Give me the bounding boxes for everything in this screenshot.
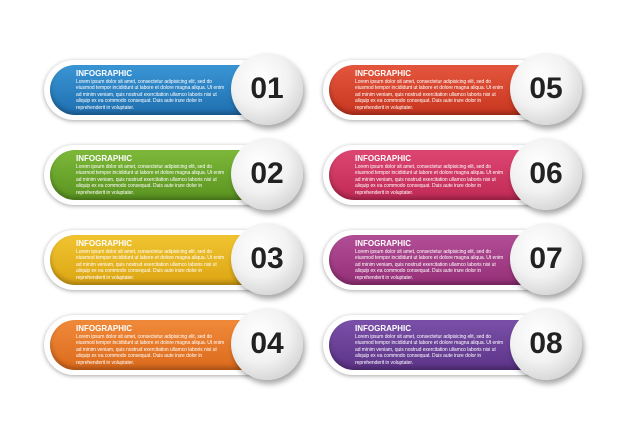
green bar — [50, 150, 265, 200]
red bar: INFOGRAPHIC — [355, 69, 411, 78]
orange bar: INFOGRAPHIC — [76, 324, 132, 333]
pink bar: INFOGRAPHIC — [355, 154, 411, 163]
item 02 — [42, 138, 308, 218]
number circle 01 — [231, 53, 303, 125]
number circle 03 — [231, 223, 303, 295]
number circle 04 — [231, 308, 303, 380]
item 01 — [42, 53, 308, 132]
yellow bar — [50, 235, 265, 285]
number circle 02 — [231, 138, 303, 210]
outer pill — [323, 145, 553, 205]
blue bar: Lorem ipsum dolor sit amet, consectetur adipisicing elit, sed do eiusmod tempor incididunt ut labore et dolore magna aliqua. Ut enim ad minim veniam, quis nostrud exercitation ullamco laboris nisi ut aliquip ex ea commodo consequat. Duis aute irure dolor in reprehenderit in voluptater. — [76, 79, 224, 111]
number circle 07 — [510, 223, 582, 295]
item 05 — [320, 53, 588, 132]
outer pill — [44, 315, 274, 375]
orange bar — [50, 320, 265, 370]
pink bar — [329, 150, 544, 200]
number circle 02: 02 — [250, 157, 284, 190]
number circle 08 — [510, 308, 582, 380]
green bar: INFOGRAPHIC — [76, 154, 132, 163]
number circle 01: 01 — [250, 72, 284, 105]
red bar: Lorem ipsum dolor sit amet, consectetur adipisicing elit, sed do eiusmod tempor incididunt ut labore et dolore magna aliqua. Ut enim ad minim veniam, quis nostrud exercitation ullamco laboris nisi ut aliquip ex ea commodo consequat. Duis aute irure dolor in reprehenderit in voluptater. — [355, 79, 503, 111]
blue bar — [50, 65, 265, 115]
item 06 — [320, 138, 588, 218]
magenta bar: INFOGRAPHIC — [355, 239, 411, 248]
red bar — [329, 65, 544, 115]
yellow bar: INFOGRAPHIC — [76, 239, 132, 248]
outer pill — [44, 145, 274, 205]
purple bar — [329, 320, 544, 370]
magenta bar — [329, 235, 544, 285]
number circle 08: 08 — [529, 327, 563, 360]
number circle 06: 06 — [529, 157, 563, 190]
outer pill — [44, 60, 274, 120]
number circle 05: 05 — [529, 72, 563, 105]
outer pill — [44, 230, 274, 290]
number circle 06 — [510, 138, 582, 210]
pink bar: Lorem ipsum dolor sit amet, consectetur adipisicing elit, sed do eiusmod tempor incididunt ut labore et dolore magna aliqua. Ut enim ad minim veniam, quis nostrud exercitation ullamco laboris nisi ut aliquip ex ea commodo consequat. Duis aute irure dolor in reprehenderit in voluptater. — [355, 164, 503, 196]
number circle 03: 03 — [250, 242, 284, 275]
item 03 — [42, 223, 308, 302]
purple bar: INFOGRAPHIC — [355, 324, 411, 333]
outer pill — [323, 230, 553, 290]
yellow bar: Lorem ipsum dolor sit amet, consectetur adipisicing elit, sed do eiusmod tempor incididunt ut labore et dolore magna aliqua. Ut enim ad minim veniam, quis nostrud exercitation ullamco laboris nisi ut aliquip ex ea commodo consequat. Duis aute irure dolor in reprehenderit in voluptater. — [76, 249, 224, 281]
outer pill — [323, 60, 553, 120]
outer pill — [323, 315, 553, 375]
green bar: Lorem ipsum dolor sit amet, consectetur adipisicing elit, sed do eiusmod tempor incididunt ut labore et dolore magna aliqua. Ut enim ad minim veniam, quis nostrud exercitation ullamco laboris nisi ut aliquip ex ea commodo consequat. Duis aute irure dolor in reprehenderit in voluptater. — [76, 164, 224, 196]
item 04 — [42, 308, 308, 388]
item 07 — [320, 223, 588, 302]
item 08 — [320, 308, 588, 388]
magenta bar: Lorem ipsum dolor sit amet, consectetur adipisicing elit, sed do eiusmod tempor incididunt ut labore et dolore magna aliqua. Ut enim ad minim veniam, quis nostrud exercitation ullamco laboris nisi ut aliquip ex ea commodo consequat. Duis aute irure dolor in reprehenderit in voluptater. — [355, 249, 503, 281]
number circle 05 — [510, 53, 582, 125]
orange bar: Lorem ipsum dolor sit amet, consectetur adipisicing elit, sed do eiusmod tempor incididunt ut labore et dolore magna aliqua. Ut enim ad minim veniam, quis nostrud exercitation ullamco laboris nisi ut aliquip ex ea commodo consequat. Duis aute irure dolor in reprehenderit in voluptater. — [76, 334, 224, 366]
number circle 07: 07 — [529, 242, 563, 275]
purple bar: Lorem ipsum dolor sit amet, consectetur adipisicing elit, sed do eiusmod tempor incididunt ut labore et dolore magna aliqua. Ut enim ad minim veniam, quis nostrud exercitation ullamco laboris nisi ut aliquip ex ea commodo consequat. Duis aute irure dolor in reprehenderit in voluptater. — [355, 334, 503, 366]
number circle 04: 04 — [250, 327, 284, 360]
blue bar: INFOGRAPHIC — [76, 69, 132, 78]
